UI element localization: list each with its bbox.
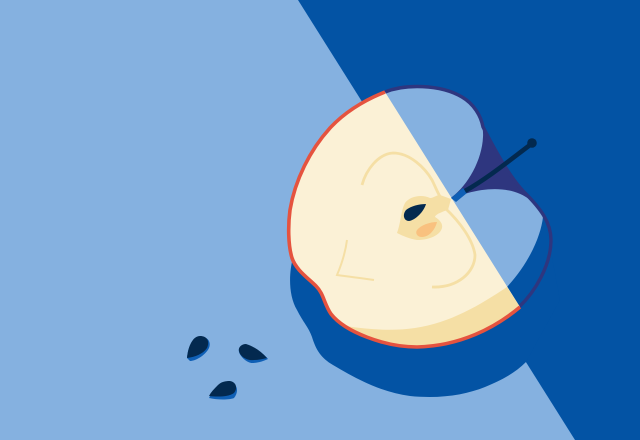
seed: left [187, 336, 210, 361]
stem base [451, 188, 467, 202]
lower lobe, see-through half [440, 189, 543, 300]
background: dark blue diagonal [298, 0, 640, 440]
core line, lower right [432, 208, 475, 287]
stem [465, 145, 530, 191]
red skin outline [289, 92, 520, 347]
navy outline, right half [385, 87, 551, 307]
seed: bottom [209, 381, 237, 400]
core seed [404, 204, 426, 221]
apple flesh [289, 92, 520, 347]
core line, lower left [337, 240, 374, 280]
apple shadow [290, 220, 560, 397]
navy wedge behind stem [440, 125, 544, 240]
flesh: lower rim band [346, 287, 520, 347]
peach spot [416, 222, 437, 237]
stem tip [527, 138, 537, 148]
upper lobe, see-through half [385, 87, 483, 205]
core centre [397, 195, 451, 240]
seed: right [239, 344, 268, 363]
core line, upper [362, 153, 441, 198]
